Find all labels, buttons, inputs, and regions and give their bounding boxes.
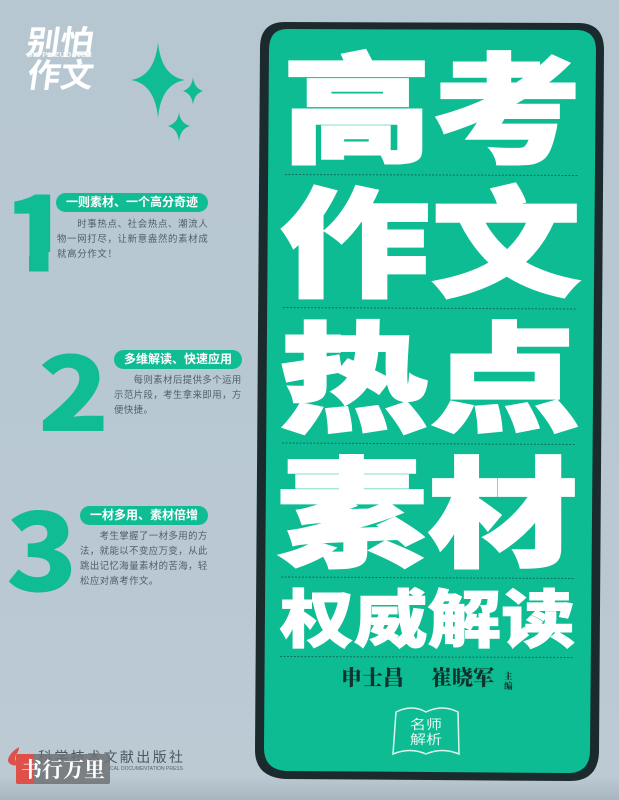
authors: 申士昌 [341,662,404,692]
callout 3 text: 松应对高考作文。 [80,575,159,586]
logo: series mark 别怕作文: 别怕 [24,16,97,64]
callout 1 text [57,218,208,259]
callout 3 text [80,530,208,586]
callout 2 text: 便快捷。 [114,404,153,415]
title: 素材: 材 [428,419,578,591]
numeral 1: 1 [4,153,71,301]
callout 2 text [114,374,242,415]
title: 热点: 点 [430,284,580,456]
icon: open book badge: 解析 [410,732,442,747]
authors: 崔晓军 [431,662,494,692]
title: 高考 [282,15,582,187]
callout 3 text: 考生掌握了一材多用的方 [100,530,208,541]
callout 3 text: 法，就能以不变应万变，从此 [80,545,208,556]
numeral 3: 3 [6,468,78,622]
publisher logo and name: 科学技术文献出版社 [38,749,183,765]
callout 3 heading: 一材多用、素材倍增 [90,508,198,522]
title: 作文 [280,149,581,321]
authors: 编 [504,680,513,692]
logo: series mark 别怕作文 [24,16,97,97]
logo: series mark 别怕作文: 作文 [25,49,97,97]
icon: open book badge [393,708,459,754]
title: 高考: 高 [282,15,432,187]
callout 3 text: 跳出记忆海量素材的苦海，轻 [80,560,208,571]
icon: sparkle stars [131,42,203,142]
callout 1 text: 就高分作文！ [57,248,118,259]
title: 热点: 热 [279,284,429,456]
callout 1 text: 物一网打尽，让新意盎然的素材成 [57,233,208,244]
watermark: 书行万里: 书行万里 [21,754,105,784]
title: 热点 [279,284,580,456]
divider lines [280,174,579,658]
subtitle: 权威解读: 权威解读 [280,568,575,661]
callout 2 heading: 多维解读、快速应用 [124,352,232,366]
authors: 主 [504,670,513,682]
publisher logo and name: CAL DOCUMENTATION PRESS [110,766,184,772]
title: 素材: 素 [277,419,427,591]
callout 2 text: 示范片段，考生拿来即用，方 [114,389,242,400]
title: 作文: 文 [431,149,581,321]
icon: open book badge: 名师 [410,717,442,732]
authors [341,662,513,692]
callout 2 heading [114,350,242,369]
callout 2 text: 每则素材后提供多个运用 [134,374,242,385]
title: 高考: 考 [432,15,582,187]
title: 作文: 作 [280,149,430,321]
callout 1 heading: 一则素材、一个高分奇迹 [66,195,198,209]
numeral 2: 2 [38,313,109,461]
callout 1 text: 时事热点、社会热点、潮流人 [77,218,208,229]
publisher logo and name [8,747,184,772]
callout 3 heading [80,506,208,525]
callout 1 heading [56,193,208,212]
logo: series mark 别怕作文: BIE PA ZUO WEN [27,49,92,59]
panel: green title card [255,15,604,781]
title: 素材 [277,419,578,591]
